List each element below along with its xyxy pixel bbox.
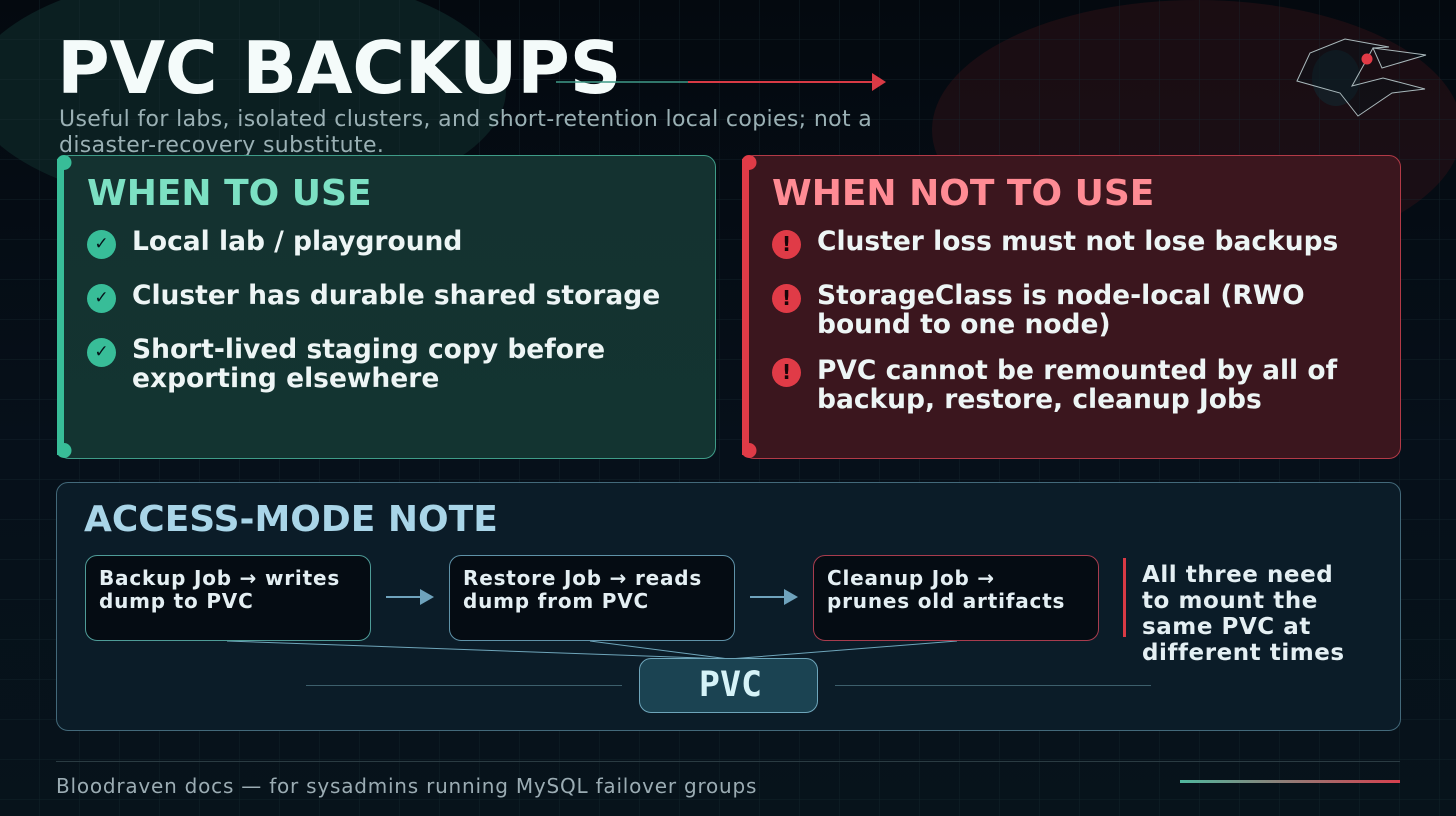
icon: check: [87, 284, 116, 313]
side note: to mount the: [1142, 588, 1318, 614]
heading: when not to use: WHEN NOT TO USE: [772, 173, 1154, 214]
item: bound to one node): [817, 309, 1111, 340]
icon: alert: !: [782, 232, 791, 256]
side note: same PVC at: [1142, 614, 1311, 640]
PVC box: PVC: [699, 665, 762, 705]
accent bar: [57, 155, 72, 458]
icon: check: [87, 230, 116, 259]
job: restore: dump from PVC: [463, 589, 649, 613]
icon: check: ✓: [94, 288, 109, 308]
item: Cluster has durable shared storage: [132, 280, 660, 311]
item: PVC cannot be remounted by all of: [817, 355, 1337, 386]
job: backup: [85, 555, 371, 641]
footer text: Bloodraven docs — for sysadmins running MySQL failover groups: [56, 774, 757, 798]
job: backup: Backup Job → writes: [99, 566, 340, 590]
icon: alert: [772, 358, 801, 387]
accent bar: [742, 155, 756, 458]
item: StorageClass is node-local (RWO: [817, 280, 1305, 311]
heading: when to use: WHEN TO USE: [87, 173, 372, 214]
item: [817, 355, 1338, 415]
icon: alert: !: [782, 286, 791, 310]
arrow: [386, 589, 434, 605]
panel: when to use: [57, 155, 716, 459]
job: cleanup: Cleanup Job →: [827, 566, 995, 590]
item: exporting elsewhere: [132, 363, 439, 394]
icon: raven logo: [1296, 38, 1426, 117]
side note: different times: [1142, 640, 1345, 666]
panel: access-mode note: [56, 482, 1401, 731]
item: Cluster loss must not lose backups: [817, 226, 1338, 257]
icon: alert: !: [782, 360, 791, 384]
icon: check: ✓: [94, 342, 109, 362]
icon: alert: [772, 284, 801, 313]
item: Short-lived staging copy before: [132, 334, 605, 365]
icon: alert: [772, 230, 801, 259]
job: restore: Restore Job → reads: [463, 566, 702, 590]
job: cleanup: [813, 555, 1099, 641]
side note: [1142, 562, 1345, 666]
icon: check: [87, 338, 116, 367]
title arrow: [556, 73, 886, 91]
item: backup, restore, cleanup Jobs: [817, 384, 1262, 415]
job: restore: [449, 555, 735, 641]
PVC box: [639, 658, 818, 713]
item: Local lab / playground: [132, 226, 462, 257]
job: cleanup: prunes old artifacts: [827, 589, 1065, 613]
job: backup: dump to PVC: [99, 589, 254, 613]
side note: All three need: [1142, 562, 1333, 588]
subtitle: [59, 107, 872, 158]
heading: access-mode note: ACCESS-MODE NOTE: [84, 499, 498, 540]
side note bar: [1123, 558, 1126, 637]
panel: when not to use: [742, 155, 1401, 459]
arrow: [750, 589, 798, 605]
footer gradient line: [1180, 780, 1400, 783]
title: PVC BACKUPS: [57, 26, 621, 110]
item: [132, 334, 605, 394]
subtitle: disaster-recovery substitute.: [59, 133, 384, 158]
icon: check: ✓: [94, 234, 109, 254]
subtitle: Useful for labs, isolated clusters, and short-retention local copies; not a: [59, 107, 872, 132]
item: [817, 280, 1305, 340]
